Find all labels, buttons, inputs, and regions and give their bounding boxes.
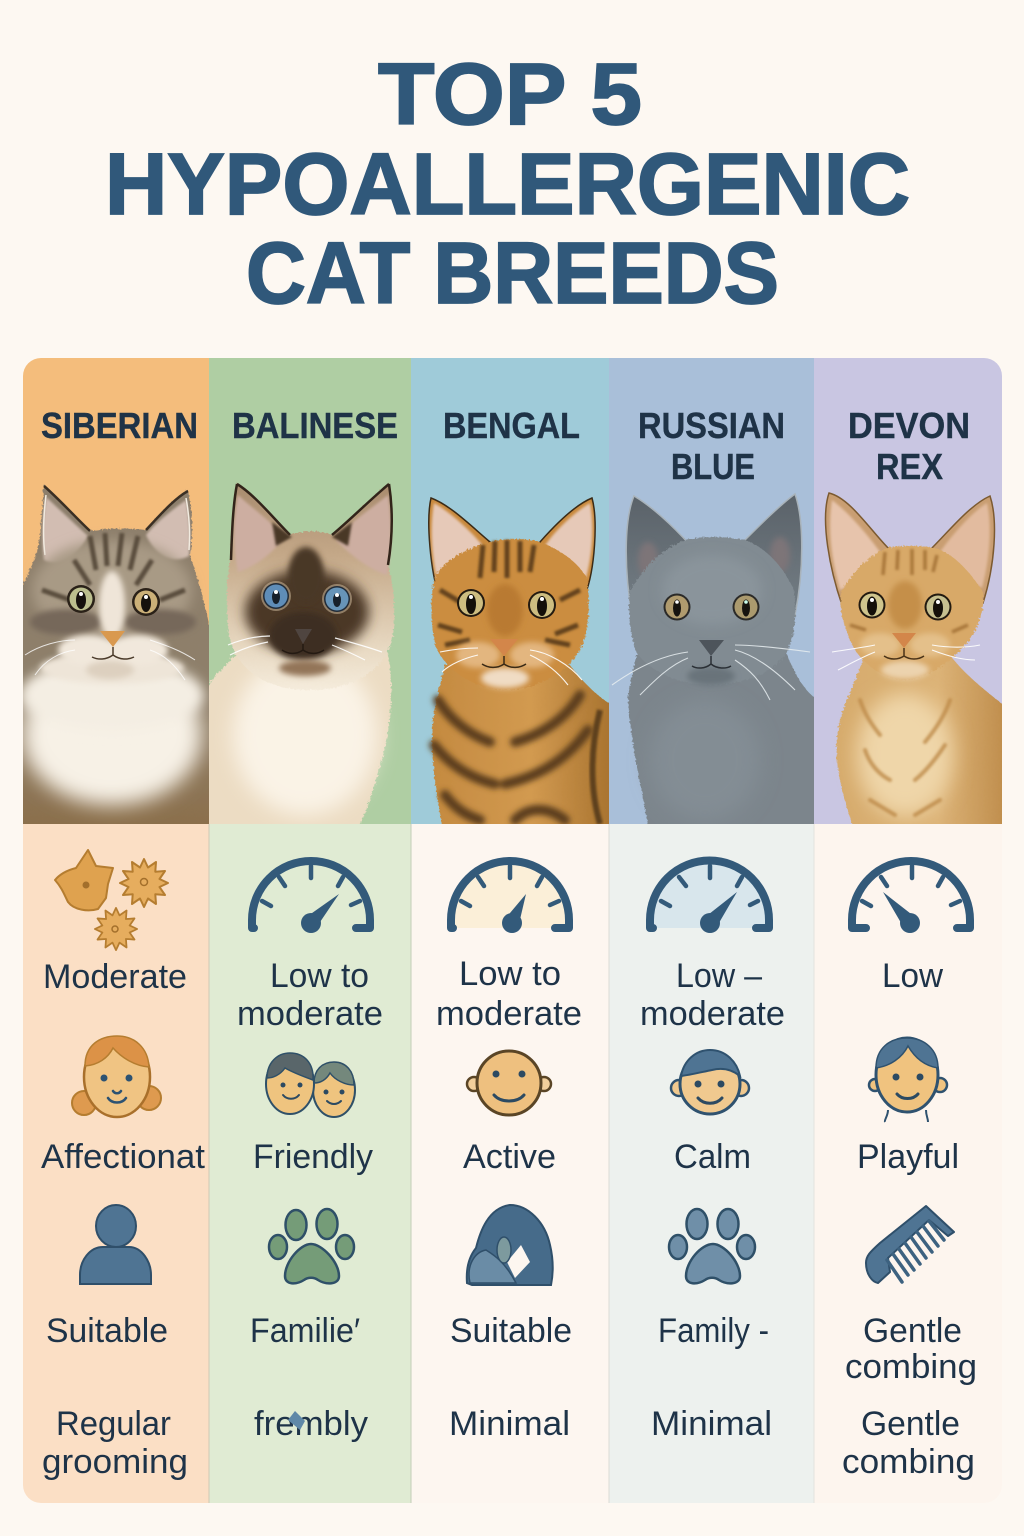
title line 3: CAT BREEDS [246, 225, 779, 322]
icon: active face [467, 1051, 551, 1115]
label: suitability: Family - [658, 1312, 769, 1350]
title line 2: HYPOALLERGENIC [105, 136, 910, 233]
label: suitability: Suitable [450, 1312, 572, 1350]
label: suitability: combing [845, 1348, 977, 1386]
label: allergen level: Low to [459, 955, 561, 993]
label: temperament: Affectionat [41, 1138, 206, 1176]
comparison table panel [20, 358, 1006, 1503]
icon: two friendly faces [266, 1053, 355, 1117]
column: Balinese [205, 358, 411, 1503]
label: allergen level [239, 964, 382, 1026]
label: allergen level: Low to [270, 957, 369, 995]
label: allergen level: Low – [676, 957, 762, 995]
label: suitability [845, 1312, 977, 1386]
icon: calm face [671, 1050, 749, 1114]
heading: Balinese: BALINESE [232, 405, 398, 446]
heading: Devon Rex [848, 405, 970, 487]
label: grooming: Gentle [861, 1405, 960, 1443]
heading: Russian Blue: BLUE [671, 446, 755, 487]
label: temperament: Friendly [253, 1138, 373, 1176]
icon: gauge low [852, 861, 970, 933]
label: grooming [42, 1405, 188, 1481]
label: temperament: Active [463, 1138, 556, 1176]
title [105, 46, 910, 322]
label: temperament: Playful [857, 1138, 959, 1176]
column: Devon Rex [814, 358, 1006, 1503]
label: allergen level: moderate [640, 995, 785, 1033]
icon: cat and person silhouette [467, 1205, 553, 1285]
icon: affectionate face [72, 1036, 161, 1117]
label: grooming: frembly [254, 1405, 368, 1443]
label: allergen level [438, 962, 580, 1026]
icon: green paw [269, 1209, 354, 1283]
icon: gauge low to moderate [252, 861, 370, 933]
cat illustration: Bengal [429, 498, 612, 830]
icon: playful face [869, 1038, 947, 1122]
heading: Devon Rex: DEVON [848, 405, 970, 446]
label: allergen level: moderate [237, 995, 383, 1033]
label: suitability: Gentle [863, 1312, 962, 1350]
label: suitability: Suitable [46, 1312, 168, 1350]
heading: Siberian: SIBERIAN [41, 405, 198, 446]
icon: comb [866, 1206, 954, 1283]
label: allergen level: Low [882, 957, 943, 995]
cat illustration: Balinese [205, 483, 394, 830]
heading: Bengal: BENGAL [443, 405, 580, 446]
column: Bengal [411, 358, 612, 1503]
label: grooming: Minimal [651, 1405, 772, 1443]
icon: gauge low to moderate [648, 860, 770, 933]
label: grooming: Minimal [449, 1405, 570, 1443]
icon: person [80, 1205, 151, 1284]
cat illustration: Devon Rex [826, 493, 1006, 830]
label: allergen level: Moderate [43, 958, 187, 996]
label: grooming: combing [842, 1443, 975, 1481]
label: grooming: grooming [42, 1443, 188, 1481]
label: grooming [842, 1405, 975, 1481]
cat illustration: Siberian [20, 484, 212, 830]
icon: blue paw [669, 1209, 755, 1283]
label: allergen level [642, 964, 784, 1026]
column: Siberian [20, 358, 212, 1503]
column: Russian Blue [609, 358, 818, 1503]
icon: allergen particles [55, 850, 168, 950]
icon: small blue artefact [288, 1411, 305, 1430]
label: temperament: Calm [674, 1138, 751, 1176]
label: allergen level: moderate [436, 995, 582, 1033]
heading: Russian Blue [640, 412, 783, 480]
title line 1: TOP 5 [378, 46, 642, 143]
label: grooming: Regular [56, 1405, 171, 1443]
heading: Russian Blue: RUSSIAN [638, 405, 785, 446]
heading: Devon Rex: REX [876, 446, 943, 487]
icon: gauge low to moderate [446, 859, 571, 933]
cat illustration: Russian Blue [612, 494, 818, 830]
label: suitability: Familie′ [250, 1312, 360, 1350]
